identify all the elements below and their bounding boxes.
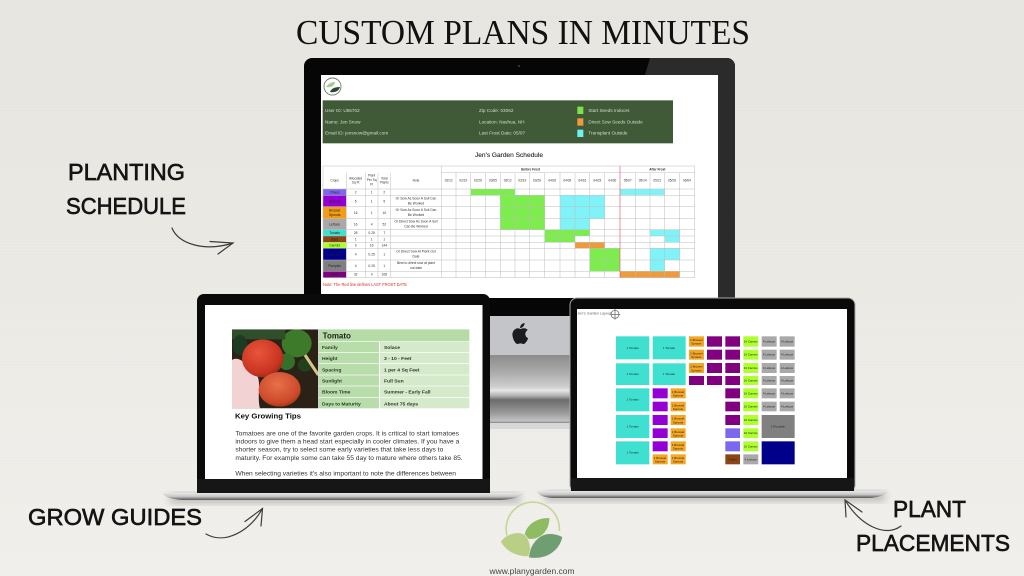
table values and notes: 0.25 [368, 252, 375, 256]
table values and notes: Or Sow As Soon A Soil Can [396, 197, 436, 201]
table headers: 03/12 [504, 179, 512, 183]
desktop monitor [304, 58, 735, 429]
block labels: 16 Carrots [744, 418, 758, 422]
schedule title: Jen's Garden Schedule [475, 152, 543, 159]
table values and notes: Best to direct sow at plant [397, 261, 435, 265]
crop name cells: Lettuce [329, 222, 340, 226]
table values and notes: 5 [383, 199, 385, 203]
broccoli blocks [653, 388, 668, 451]
block labels: 1 Brussel [690, 338, 703, 342]
grow guide screen [232, 329, 469, 478]
block labels: Sprouts [673, 434, 684, 438]
block labels: 4 Lettuce [781, 353, 793, 357]
schedule info bar: Zip Code: 03062 [479, 108, 514, 113]
crop name cells: Brussel [329, 209, 340, 213]
table headers: Per Sq [367, 178, 377, 182]
block labels: 1 Brussel [672, 456, 685, 460]
block labels: Sprouts [673, 407, 684, 411]
laptop body [197, 294, 490, 493]
table headers: Allocated [349, 176, 362, 180]
table values and notes: Can Be Worked [404, 225, 428, 229]
table headers: Before Frost [521, 167, 541, 171]
plant facts table [319, 329, 469, 408]
plant facts table: Tomato [323, 332, 351, 341]
block labels: Sprouts [673, 447, 684, 451]
block labels: 16 Carrots [744, 366, 758, 370]
table values and notes: 2 [383, 190, 385, 194]
logo right leaf [529, 534, 563, 558]
table values and notes: 1 [371, 211, 373, 215]
plant facts table: 3 - 10 - Feet [384, 356, 412, 362]
growing tips body text [235, 430, 463, 478]
block labels: 1 Tomato [627, 346, 639, 350]
block labels: 16 Carrots [744, 379, 758, 383]
crop name cells: Carrots [329, 244, 340, 248]
schedule info bar: Direct Sow Seeds Outside [588, 119, 643, 124]
lettuce blocks [743, 336, 795, 464]
table values and notes: 2 [355, 190, 357, 194]
brussel sprouts blocks [653, 336, 704, 464]
crop name cells: Sprouts [329, 213, 341, 217]
table values and notes: 108 [382, 273, 387, 277]
plant facts table: Sunlight [322, 378, 342, 384]
laptop shadow [545, 492, 885, 501]
logo top leaf [524, 518, 549, 539]
growing tips body text: shorter season, try to select some early varieties that take less days to [235, 447, 444, 454]
logo left leaf [501, 533, 531, 556]
plant facts table: Spacing [322, 367, 341, 373]
schedule footnote: Note: The Red line defines LAST FROST DATE [323, 282, 407, 287]
table values and notes: 4 [355, 264, 357, 268]
block labels: 4 Lettuce [763, 366, 775, 370]
block labels: 16 Carrots [744, 444, 758, 448]
table headers: Note [413, 179, 420, 183]
table values and notes: 1 [355, 237, 357, 241]
table headers: 05/21 [653, 179, 662, 183]
growing tips body text: maturity. For example some can take 55 day to mature where others take 85. [235, 455, 463, 462]
table headers: Total [381, 176, 388, 180]
block labels [627, 338, 793, 464]
pumpkin and squash blocks [762, 415, 795, 464]
plant facts table: Family [322, 345, 338, 351]
table values and notes: 4 [355, 252, 357, 256]
garden layout screen [577, 309, 795, 464]
table headers: 02/26 [474, 179, 482, 183]
schedule info bar: Location: Nashua, NH [479, 119, 525, 124]
block labels: 4 Lettuce [781, 405, 793, 409]
table headers: 05/07 [624, 179, 632, 183]
table values and notes: 1 [371, 237, 373, 241]
table values and notes: 52 [382, 222, 386, 226]
table headers: Sq Ft [352, 181, 360, 185]
block labels: Sprouts [673, 420, 684, 424]
table values and notes: 32 [354, 273, 358, 277]
block labels: 4 Lettuce [763, 379, 775, 383]
label: grow guides: GROW GUIDES [28, 504, 202, 530]
planting schedule screen [323, 78, 695, 287]
schedule info bar [323, 100, 673, 143]
block labels: 4 Lettuce [763, 391, 775, 395]
table values and notes: 0.25 [368, 264, 375, 268]
crop name cells [323, 189, 346, 278]
table values and notes: 1 [371, 190, 373, 194]
block labels: Sprouts [655, 460, 666, 464]
layout heading: Jen's Garden Layout [577, 311, 611, 315]
website url: www.planygarden.com [489, 566, 574, 576]
table values and notes: 10 [382, 211, 386, 215]
table values and notes [354, 190, 438, 277]
schedule info bar: Email ID: jensnow@gmail.com [325, 131, 388, 136]
block labels: Sprouts [691, 355, 702, 359]
table values and notes: 28 [354, 231, 358, 235]
table values and notes: 1 [371, 199, 373, 203]
crop name cells: Onion [330, 273, 339, 277]
crop name cells: Squash [329, 252, 340, 256]
timeline bars [471, 189, 680, 278]
block labels: 1 Brussel [672, 390, 685, 394]
table headers: 04/09 [563, 179, 572, 183]
block labels: 1 Tomato [627, 451, 639, 455]
table values and notes: 1 [383, 252, 385, 256]
table values and notes: 16 [354, 222, 358, 226]
tomato photo [232, 329, 318, 408]
block labels: 1 Pumpkin [771, 424, 785, 428]
block labels: 1 Brussel [654, 456, 667, 460]
block labels: 16 Carrots [744, 431, 758, 435]
block labels: 1 Brussel [672, 403, 685, 407]
growing tips body text: Tomatoes are one of the favorite garden crops. It is critical to start tomatoes [235, 430, 459, 437]
crop name cells: Beet [331, 237, 338, 241]
schedule info bar: Transplant Outside [588, 131, 628, 136]
laptop base [537, 491, 888, 498]
schedule table [323, 166, 695, 278]
plant facts table: About 75 days [384, 401, 418, 407]
crop name cells: Chives [330, 190, 340, 194]
block labels: 4 Lettuce [781, 379, 793, 383]
block labels: 16 Carrots [744, 339, 758, 343]
table values and notes: 7 [383, 231, 385, 235]
table values and notes: Or Direct Sow As Soon A Soil [394, 220, 438, 224]
monitor chin [486, 316, 572, 355]
label: planting schedule [66, 159, 186, 219]
table values and notes: Or Direct Sow At Plant Out [396, 249, 436, 253]
growing tips body text: When selecting varieties it's also important to note the differences between [235, 471, 457, 478]
schedule info bar: Last Frost Date: 05/07 [479, 131, 525, 136]
table values and notes: 1 [383, 264, 385, 268]
table headers: 03/19 [518, 179, 527, 183]
key growing tips heading: Key Growing Tips [235, 412, 301, 421]
table headers: 02/19 [459, 179, 468, 183]
chives and beet blocks [725, 428, 740, 464]
monitor stand [486, 355, 572, 429]
table headers: 03/05 [489, 179, 497, 183]
table headers: 04/16 [578, 179, 587, 183]
label: plant placements [856, 496, 1010, 556]
table headers: 02/12 [445, 179, 453, 183]
block labels: 4 Lettuce [781, 391, 793, 395]
table values and notes: 16 [354, 211, 358, 215]
table headers [330, 167, 691, 186]
crop name cells: Broccoli [329, 199, 341, 203]
schedule logo [324, 78, 341, 95]
block labels: Sprouts [673, 394, 684, 398]
schedule info bar: User ID: U55702 [325, 108, 360, 113]
left laptop [163, 294, 523, 503]
logo ring [506, 502, 559, 536]
block labels: 1 Brussel [672, 443, 685, 447]
table values and notes: 0.25 [368, 231, 375, 235]
table headers: 05/28 [668, 179, 676, 183]
table headers: After Frost [649, 167, 666, 171]
block labels: Sprouts [691, 368, 702, 372]
laptop base [163, 493, 523, 500]
label: planting schedule: SCHEDULE [66, 193, 186, 219]
block labels: 16 Carrots [744, 405, 758, 409]
block labels: 16 Carrots [744, 391, 758, 395]
table grid [323, 166, 695, 278]
carrot blocks [743, 336, 758, 451]
monitor screen [321, 75, 718, 298]
icon: compass [610, 309, 620, 320]
block labels: 1 Tomato [627, 424, 639, 428]
table headers: 05/14 [639, 179, 647, 183]
block labels: 1 Tomato [627, 398, 639, 402]
table values and notes: Or Sow As Soon A Soil Can [396, 208, 436, 212]
label: planting schedule: PLANTING [68, 159, 185, 185]
block labels: 1 Brussel [690, 351, 703, 355]
block labels: 4 Lettuce [781, 366, 793, 370]
block labels: 1 Brussel [672, 417, 685, 421]
block labels: Sprouts [673, 460, 684, 464]
table values and notes: 144 [382, 244, 387, 248]
table values and notes: 9 [371, 273, 373, 277]
label: plant placements: PLANT [893, 496, 966, 522]
plant facts table: Summer - Early Fall [384, 389, 431, 395]
block labels: 1 Tomato [627, 372, 639, 376]
table values and notes: Date [412, 254, 420, 258]
schedule info bar: Start Seeds Indoors [588, 108, 630, 113]
title: CUSTOM PLANS IN MINUTES [296, 13, 750, 52]
right laptop [537, 298, 888, 501]
table values and notes: 4 [371, 222, 373, 226]
plant facts table: Full Sun [384, 378, 404, 384]
block labels: 4 Lettuce [763, 405, 775, 409]
onion blocks [689, 336, 740, 425]
monitor bezel [304, 58, 735, 316]
plant facts table: 1 per 4 Sq Feet [384, 367, 420, 373]
table headers: 03/26 [533, 179, 541, 183]
arrow: plant placements to laptop [845, 500, 901, 531]
plant facts table: Bloom Time [322, 389, 351, 395]
block labels: Sprouts [691, 342, 702, 346]
growing tips body text: indoors to give them a head start especially in cooler climates. If you have a [235, 438, 460, 445]
block labels: 1 Brussel [672, 430, 685, 434]
laptop screen [205, 305, 482, 479]
block labels: 1 Brussel [690, 365, 703, 369]
table values and notes: 1 [383, 237, 385, 241]
table headers: 06/04 [683, 179, 691, 183]
plant facts table: Days to Maturity [322, 401, 361, 407]
block labels: 4 Lettuce [781, 339, 793, 343]
table values and notes: 9 [355, 244, 357, 248]
last frost line [619, 166, 621, 278]
table headers: Ft [370, 182, 373, 186]
table values and notes: 16 [370, 244, 374, 248]
plant facts table: Solace [384, 345, 400, 351]
arrow: planting schedule to desktop [172, 228, 233, 254]
logo [501, 502, 563, 558]
block labels: 1 Tomato [663, 346, 675, 350]
table headers: Plant [368, 174, 375, 178]
schedule info bar: Name: Jen Snow [325, 119, 361, 124]
block labels: 1 Tomato [663, 372, 675, 376]
plant facts table: Height [322, 356, 338, 362]
table headers: 04/30 [608, 179, 617, 183]
block labels: 4 Lettuce [763, 339, 775, 343]
table values and notes: Be Worked [408, 202, 424, 206]
table headers: Crops [330, 179, 339, 183]
laptop body [570, 298, 855, 492]
laptop screen [577, 309, 847, 478]
block labels: 16 Carrots [744, 353, 758, 357]
table headers: 04/23 [593, 179, 602, 183]
icon: apple logo [512, 323, 528, 344]
block labels: 4 Lettuce [745, 457, 757, 461]
table values and notes: out date [410, 266, 422, 270]
crop name cells: Pumpkin [328, 264, 341, 268]
table values and notes: Be Worked [408, 213, 424, 217]
crop name cells: Tomato [329, 231, 340, 235]
tomato blocks [616, 336, 686, 464]
arrow: grow guides to laptop [206, 508, 262, 538]
block labels: 4 Lettuce [763, 353, 775, 357]
label: plant placements: PLACEMENTS [856, 530, 1010, 556]
table headers: 04/02 [548, 179, 557, 183]
table values and notes: 5 [355, 199, 357, 203]
table headers: Plants [380, 181, 389, 185]
block labels: 1 Beet [728, 457, 737, 461]
laptop shadow [170, 494, 520, 503]
